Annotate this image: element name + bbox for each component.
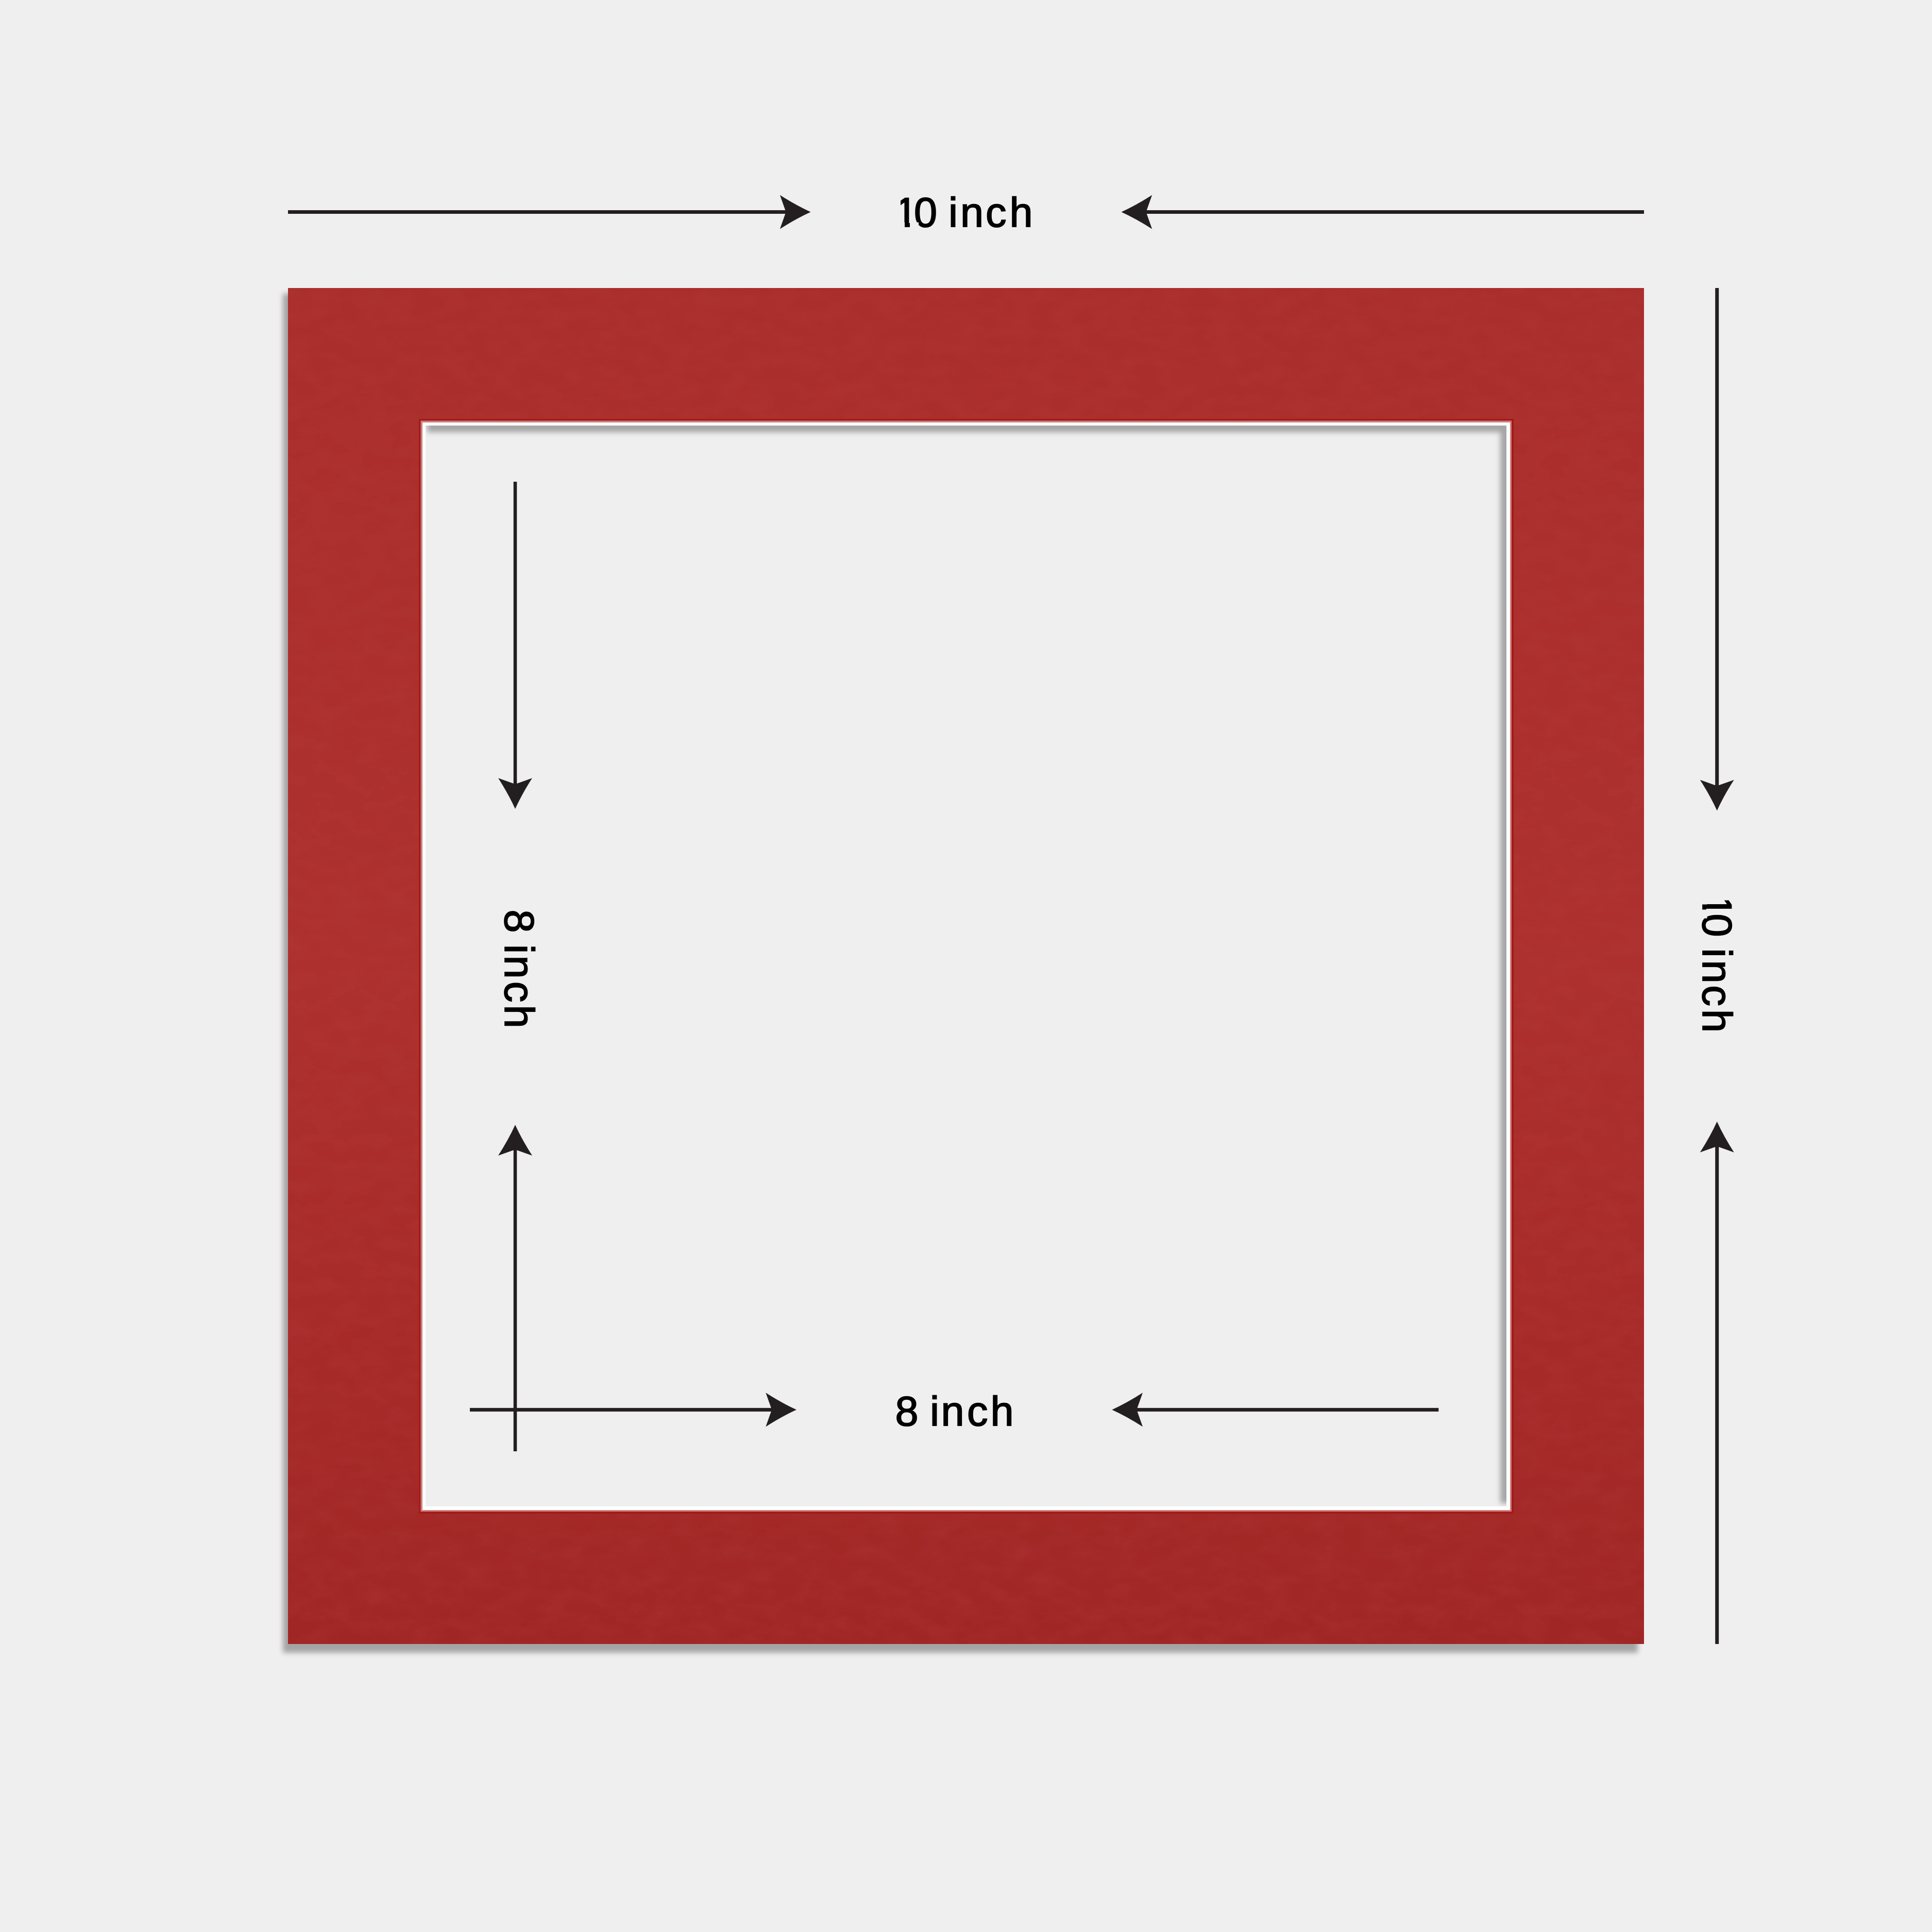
- mat surface: [288, 288, 1644, 1644]
- inner left dimension: 8 inch: [496, 482, 542, 1451]
- mat paper texture: [288, 288, 1644, 1644]
- arrow: inner bottom, pointing right: [470, 1393, 796, 1427]
- dimension diagram: [280, 195, 1734, 1656]
- bevel: pink cut edge: [420, 420, 1512, 1512]
- label: top 10 inch: 10 inch: [894, 190, 1033, 236]
- arrow: top, pointing right: [288, 195, 811, 229]
- label: inner bottom 8 inch: 8 inch: [895, 1388, 1014, 1435]
- arrow: inner left, pointing down: [498, 482, 532, 809]
- arrow: right side, pointing down: [1700, 288, 1734, 810]
- bevel: white core: [422, 422, 1510, 1510]
- bevel: dark red cut edge: [419, 419, 1514, 1514]
- label: inner left 8 inch: 8 inch: [496, 910, 542, 1028]
- top dimension: 10 inch: [288, 190, 1644, 236]
- arrow: inner left, pointing up: [498, 1125, 532, 1451]
- panel: red mat board: [283, 288, 1644, 1653]
- mat drop shadow: [283, 294, 1638, 1653]
- arrow: inner bottom, pointing left: [1112, 1393, 1438, 1427]
- arrow: right side, pointing up: [1700, 1122, 1734, 1644]
- window inner shadow: [427, 407, 1525, 1503]
- label: right 10 inch: 10 inch: [1693, 894, 1740, 1032]
- right dimension: 10 inch: [1693, 288, 1740, 1644]
- window opening: [426, 426, 1506, 1506]
- inner bottom dimension: 8 inch: [470, 1388, 1438, 1435]
- arrow: top, pointing left: [1121, 195, 1644, 229]
